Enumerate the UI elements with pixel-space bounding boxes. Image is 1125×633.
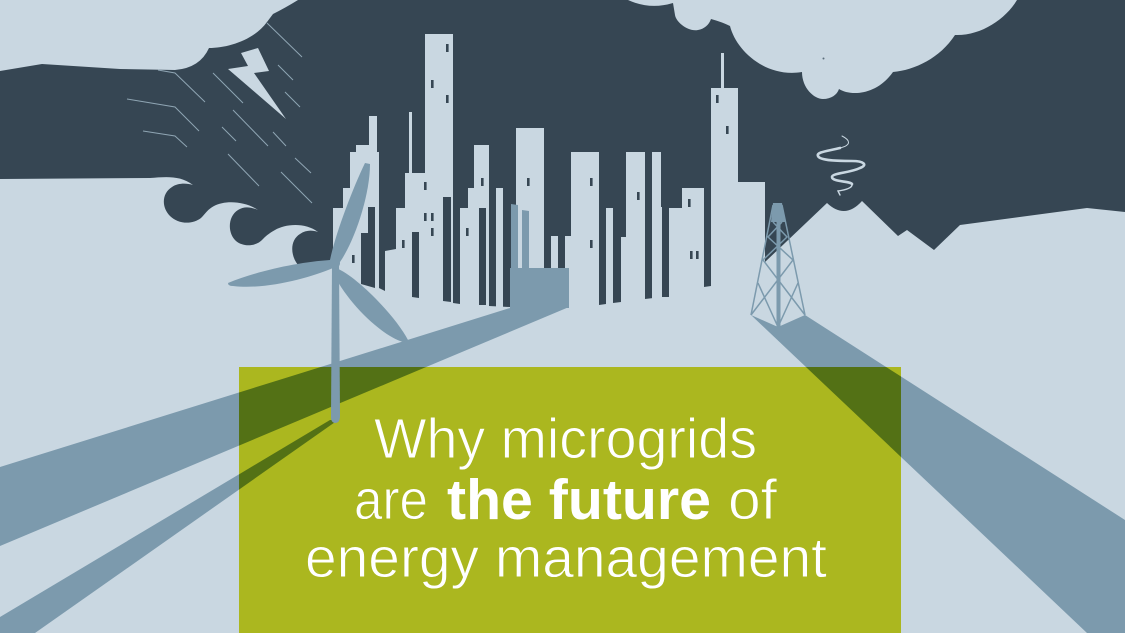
title line 2: are	[354, 468, 428, 532]
green title panel	[239, 367, 901, 633]
tiny cloud speck	[822, 58, 824, 60]
title line 1: Why microgrids	[374, 407, 757, 471]
factory with chimneys	[510, 204, 569, 308]
icon: smoke squiggle	[818, 136, 864, 195]
icon: lattice tower	[751, 203, 805, 327]
title text	[305, 407, 827, 590]
building dark recesses	[361, 197, 486, 305]
dark stormy sky with clouds, waves and mountains	[0, 0, 1125, 307]
title line 2	[354, 468, 777, 532]
title line 2: of	[728, 468, 777, 532]
icon: lightning bolt	[228, 48, 286, 119]
title line 3: energy management	[305, 526, 827, 590]
light beams on the ground	[0, 307, 1125, 633]
beam overlaps on the panel	[239, 367, 901, 490]
city skyline	[333, 34, 765, 320]
icon: wind turbine	[228, 163, 408, 423]
rain lines	[127, 23, 312, 203]
building windows	[352, 44, 729, 263]
title line 2: the future	[447, 468, 711, 532]
